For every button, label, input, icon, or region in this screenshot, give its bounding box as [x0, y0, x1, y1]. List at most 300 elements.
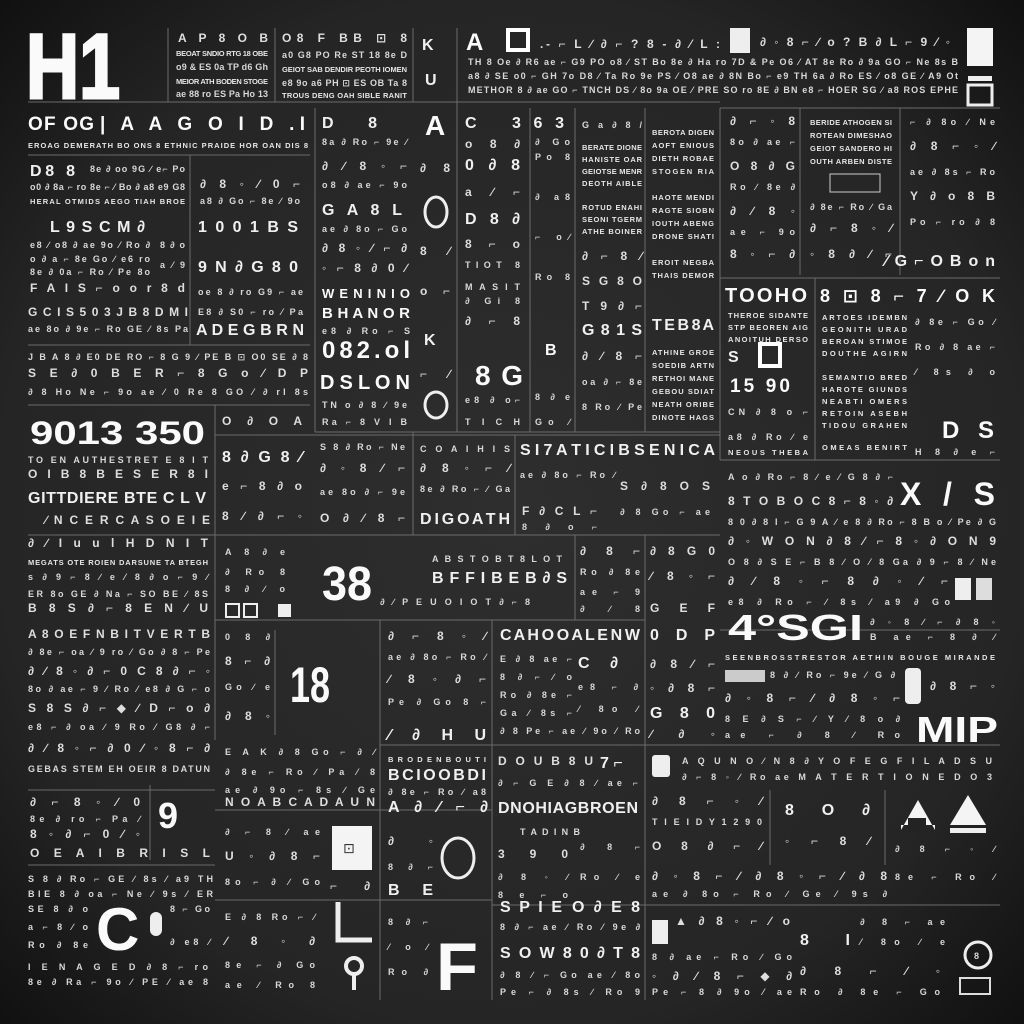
panel: left upper right grid: 1 0 0 1 B S — [198, 219, 298, 236]
panel: narrow column 3: a ∕ ⌐ — [465, 185, 520, 199]
panel: middle band: e ⌐ 8 ∂ o — [222, 479, 302, 493]
panel: right lower heading and glyph rows: A Q U N O ∕ N 8 ∂ Y O F E G F I L A D S U — [682, 756, 992, 766]
panel: right lower heading and glyph rows: 8 O ∂ — [785, 802, 870, 819]
panel: right middle: GEONITH URAD — [822, 325, 908, 334]
panel: narrow column 3: 0 ∂ 8 — [465, 157, 520, 174]
icon: top glyphs K and U — [422, 37, 437, 89]
panel: bars and dense columns: ROTUD ENAHI — [582, 203, 642, 212]
panel: bottom middle blocks — [222, 902, 372, 990]
panel: right lower heading and glyph rows: ∂ ⌐ 8 ◦ ∕ Ro ae M A T E R T I O N E D O 3 — [682, 772, 992, 782]
icon: top glyphs K and U: K — [422, 37, 434, 54]
panel: right lower band: ∂ 8 ⌐ ◦ — [930, 679, 995, 693]
panel: right middle: ANOITUH DERSO — [728, 335, 808, 344]
panel: bottom left: SE 8 ∂ o — [28, 904, 88, 914]
panel: column 380 to 492: ∕ 8 ◦ ∂ ⌐ — [385, 672, 486, 686]
panel: right middle: STP BEOREN AIG — [728, 323, 808, 332]
panel: bottom middle blocks: ae ∕ Ro 8 — [225, 980, 315, 990]
panel: upper right dense grid: ∕ G ⌐ O B o n — [882, 253, 995, 270]
panel: narrow column 3: 8 G — [475, 360, 523, 391]
panel: lower centre-right column: ∕ ∂ ◦ — [647, 727, 715, 741]
panel: glyph column with letter A: 8 ∕ — [420, 244, 453, 258]
panel: bottom left: ∂ ⌐ 8 ◦ ∕ 0 — [30, 795, 140, 809]
panel: right middle: D S — [942, 417, 994, 444]
panel: upper right dense grid: ae ⌐ 9o — [730, 227, 796, 237]
panel: bottom left: 9 — [158, 795, 178, 836]
panel: middle band: 8e ∂ Ro ⌐ ∕ Ga — [420, 484, 511, 494]
panel: centre-left column: TN o ∂ 8 ∕ 9e — [322, 400, 407, 410]
panel: middle band: S 8 ∂ Ro ⌐ Ne — [320, 442, 405, 452]
panel: bottom right blocks: 8 ∂ ae ⌐ Ro ∕ Go — [652, 952, 792, 962]
panel: upper right dense grid: ∂ 8e ⌐ Ro ∕ Ga — [810, 202, 893, 212]
panel: right middle: H 8 ∂ e ⌐ — [915, 447, 995, 457]
panel: diagnostic heading column: 3 9 0 — [498, 847, 568, 861]
panel: bars and dense columns: NEATH ORIBE — [652, 400, 714, 409]
panel: bars and dense columns: ∂ Go — [535, 137, 570, 147]
panel: middle band: C O A I H I S — [420, 444, 510, 454]
panel: bars and dense columns: HANISTE OAR — [582, 155, 643, 164]
panel: left upper right grid: A D E G B R N — [196, 322, 304, 339]
panel: right lower heading and glyph rows: 8e ⌐ Ro ∕ — [895, 872, 997, 882]
panel: right lower heading and glyph rows — [652, 755, 997, 899]
panel: centre-left column: ◦ ⌐ 8 ∂ 0 ∕ — [322, 261, 410, 275]
panel: central numbers: ∂ ∕ P E U O I O T ∂ ⌐ 8 — [380, 597, 530, 607]
panel: left text bands: s ∂ 9 ⌐ 8 ∕ e ⁄ 8 ∂ o ⌐ 9 ∕ — [28, 572, 210, 582]
panel: right lower band: ∂ ◦ 8 ⌐ ∕ ∂ 8 ◦ ⌐ — [725, 691, 900, 705]
panel: bars and dense columns: BERATE DIONE — [582, 143, 642, 152]
panel: bars and dense columns: IOUTH ABENG — [652, 219, 714, 228]
panel: bars and dense columns: EROIT NEGBA — [652, 258, 715, 267]
panel: left upper blocks: L 9 S C M ∂ — [50, 219, 145, 236]
panel: bars and dense columns: ⌐ o∕ — [535, 232, 572, 242]
panel: upper right dense grid: GEIOT SANDERO HI — [810, 144, 892, 153]
panel: right middle: a8 ∂ Ro ∕ e — [728, 432, 808, 442]
panel: narrow column 3: e8 ∂ o⌐ — [465, 395, 520, 405]
panel: bars and dense columns: Po 8 — [535, 152, 570, 162]
panel: left upper right grid: oe 8 ∂ ro G9 ⌐ ae — [198, 287, 303, 297]
panel: centre-left column: ae ∂ 8o ⌐ Go — [322, 224, 408, 234]
panel: top strip text blocks: o9 & ES 0a TP d6 Gh — [176, 62, 268, 72]
panel: bars and dense columns: oa ∂ ⌐ 8e — [582, 377, 642, 387]
panel: bottom centre text: O ∂ E 8 — [572, 899, 640, 916]
panel: lower centre-right column: ∂ ∕ 8 — [580, 604, 640, 614]
panel: middle band: 8 ∕ ∂ ⌐ ◦ — [222, 509, 302, 523]
panel: lower centre column with circle — [386, 799, 488, 1005]
panel: diagnostic heading column: C ∂ — [578, 655, 618, 672]
panel: diagnostic heading column: ⁄ 8o ∕ — [576, 704, 640, 714]
panel: upper right dense grid: 8 ◦ ⌐ ∂ — [730, 247, 795, 261]
panel: glyph column with letter A: K — [424, 332, 436, 349]
panel: left text bands: ∕ N C E R C A S O E I E — [42, 513, 210, 527]
panel: central numbers: 8 ∂ ∕ o — [225, 584, 286, 594]
panel: column 380 to 492: Pe ∂ Go 8 ⌐ — [388, 697, 486, 707]
panel: bottom right blocks: ∂ 8 ⌐ ∕ ◦ — [800, 964, 940, 978]
panel: lower centre-right column — [580, 544, 715, 741]
panel: narrow column 3: M A S I T — [465, 282, 520, 292]
panel: bottom left: C — [96, 896, 139, 963]
panel: left text bands: TO EN AUTHESTRET E 8 I T — [28, 455, 208, 465]
panel: right dense band: X / S — [900, 476, 995, 512]
panel: diagnostic heading column: C A H O O A L E N W — [500, 627, 641, 644]
panel: narrow column 3: ∂ ⌐ 8 — [465, 314, 520, 328]
panel: glyph column with letter A — [420, 110, 453, 418]
panel: lower centre column with circle: A ∂ ∕ ⌐ ∂ — [388, 799, 488, 816]
panel: lower centre-right column: ∂ 8 ⌐ — [580, 544, 640, 558]
panel: upper right dense grid — [730, 114, 998, 270]
panel: upper right dense grid: ∂ ⌐ ◦ 8 — [730, 114, 795, 128]
panel: bars and dense columns: 3 6 3 — [512, 115, 564, 132]
panel: column 380 to 492: B C I O O B D I — [388, 767, 486, 784]
panel: right middle: TIDOU GRAHEN — [822, 421, 907, 430]
panel: bars and dense columns: G 8 1 S — [582, 322, 642, 339]
panel: central numbers: 38 — [322, 558, 372, 611]
panel: upper right dense grid: ∂ ⌐ 8 ◦ ∕ — [810, 221, 895, 235]
panel: top right strip: a8 ∂ SE o0 ⌐ GH 7o D8 ∕ Ta Ro 9e PS ⁄ O8 ae ∂ 8N Bo ⌐ e9 TH 6a ∂ Ro ES ⁄ o8 GE ∕ A9 Ot — [468, 71, 958, 81]
panel: left upper blocks: e8 ∕ o8 ∂ ae 9o ⁄ Ro ∂ — [30, 240, 151, 250]
panel: left text bands: GEBAS STEM EH OEIR 8 DATUN — [28, 764, 210, 774]
panel: bottom right blocks — [652, 914, 991, 997]
panel: left upper blocks: HERAL OTMIDS AEGO TIAH BROE — [30, 197, 185, 206]
panel: left text bands: ER 8o GE ∂ Na ⌐ SO BE ∕ 8S — [28, 589, 208, 599]
panel: bars and dense columns: ∂ ⌐ 8 ∕ — [582, 249, 645, 263]
panel: lower centre column with circle: ∂ ◦ — [388, 834, 433, 848]
panel: NOAB heading and icon card: U ◦ ∂ 8 ⌐ — [225, 849, 320, 863]
panel: narrow column 3: ∂ Gi 8 — [465, 296, 520, 306]
panel: bars and dense columns: SOEDIB ARTN — [652, 361, 714, 370]
panel: lower centre-right column: ae ⌐ 9 — [580, 587, 640, 597]
panel: NOAB heading and icon card: 8o ⌐ ∂ ∕ Go — [225, 877, 320, 887]
panel: bottom left: 8e ∂ ro ⌐ Pa ∕ — [30, 814, 142, 824]
panel: left upper blocks — [28, 163, 189, 334]
panel: upper right dense grid: O 8 ∂ G — [730, 159, 795, 173]
panel: column 380 to 492: ∂ ⌐ 8 ◦ ∕ — [388, 629, 489, 643]
panel: top right strip: TH 8 Oe ∂ R6 ae ⌐ G9 PO o8 ∕ ST Bo 8e ∂ Ha ro 7D & Pe O6 ⁄ AT 8e Ro ∂ 9a GO ⌐ Ne 8s B — [468, 57, 958, 67]
panel: bottom right blocks: Pe ⌐ 8 ∂ 9o ⁄ ae — [652, 987, 792, 997]
panel: top strip text blocks: MEIOR ATH BODEN STOGE — [176, 77, 268, 86]
panel: central numbers: A B S T O B T 8 L O T — [432, 554, 562, 564]
panel: diagnostic heading column: 8 e ⌐ o — [498, 890, 568, 900]
panel: right lower heading and glyph rows: ◦ ⌐ 8 ∕ — [785, 834, 873, 848]
panel: centre-left column: W E N I N I O — [322, 286, 410, 301]
panel: right middle: Ro ∂ 8 ae ⌐ — [915, 342, 995, 352]
panel: bars and dense columns: HAOTE MENDI — [652, 193, 714, 202]
panel: right dense band: A o ∂ Ro ⌐ 8 ∕ e ⁄ G 8 ∂ ⌐ — [728, 472, 893, 482]
panel: right lower heading and glyph rows: ∂ 8 ⌐ ◦ ∕ — [895, 844, 997, 854]
panel: lower centre-right column: ∕ 8 ◦ ⌐ — [647, 569, 715, 583]
panel: bottom left: ∂ e8 ∕ — [170, 937, 212, 947]
heading: TOOHO row — [725, 285, 995, 307]
panel: bars and dense columns: DIETH ROBAE — [652, 154, 714, 163]
panel: middle band: O ∂ O A — [222, 414, 302, 428]
panel: diagnostic heading column: Ro ∂ 8e ⌐ — [500, 690, 572, 700]
panel: bottom centre text: 8 ∂ ⌐ ae ∕ Ro ⁄ 9e ∂ — [500, 922, 641, 932]
panel: bars and dense columns: ATHINE GROE — [652, 348, 714, 357]
panel: centre-left column: 8a ∂ Ro ⌐ 9e ∕ — [322, 137, 409, 147]
panel: diagnostic heading column: ∂ ⌐ G E ∂ 8 ∕ ae ⌐ — [498, 778, 638, 788]
panel: bottom centre text: S O W 8 0 ∂ T 8 — [500, 945, 640, 962]
panel: top strip text blocks: TROUS DENG OAH SIBLE RANIT — [282, 91, 407, 100]
panel: bars and dense columns: AOFT ENIOUS — [652, 141, 714, 150]
panel: bottom right blocks: ◦ ∂ ∕ 8 ⌐ ◆ ∂ — [652, 969, 792, 983]
panel: bottom centre text: Pe ⌐ ∂ 8s ∕ Ro 9 — [500, 987, 640, 997]
panel: left upper right grid: ∂ 8 ◦ ∕ 0 ⌐ — [200, 177, 300, 191]
panel: top right strip: METHOR 8 ∂ ae GO ⌐ TNCH DS ∕ 8o 9a OE ⁄ PRE SO ro 8E ∂ BN e8 ⌐ HOER SG ∕ a8 ROS EPHE — [468, 85, 958, 95]
panel: bars and dense columns: 8 Ro ∕ Pe — [582, 402, 642, 412]
panel: middle band: S ∂ 8 O S — [620, 479, 710, 493]
panel: middle band — [222, 414, 715, 532]
panel: left upper blocks: ae 8o ∂ 9e ⌐ Ro GE ∕ 8s Pa — [28, 324, 189, 334]
panel: diagnostic heading column: D O U B 8 U — [498, 754, 593, 768]
panel: lower centre column with circle: 8 ∂ ⌐ — [388, 917, 428, 927]
panel: right lower band: ae ⌐ ∂ 8 ∕ Ro — [725, 730, 900, 740]
panel: top strip text blocks: GEIOT SAB DENDIR PEOTH IOMEN — [282, 65, 407, 74]
panel: left text bands: O I B 8 B E S E R 8 I — [28, 467, 208, 481]
heading: OF OG row: OF OG — [28, 114, 94, 135]
panel: left text bands: A 8 O E F N B I T V E R T B — [28, 627, 210, 641]
panel: centre-left column: D S L O N — [320, 372, 410, 394]
panel: bars and dense columns: THAIS DEMOR — [652, 271, 715, 280]
panel: right middle: DOUTHE AGIRN — [822, 349, 907, 358]
panel: top strip text blocks: O8 F BB ⊡ 8 — [282, 31, 407, 45]
panel: central numbers: B F F I B E B ∂ S — [432, 570, 567, 587]
heading: TOOHO row: 8 ⊡ 8 ⌐ 7 ∕ O K — [820, 286, 995, 306]
panel: NOAB heading and icon card — [225, 795, 375, 893]
panel: right dense band: 8 T O B O C 8 ⌐ 8 ◦ ∂ — [728, 494, 893, 508]
panel: bottom left: 8 ◦ ∂ ⌐ 0 ∕ ◦ — [30, 827, 140, 841]
panel: central numbers: A 8 ∂ e — [225, 547, 285, 557]
panel: bottom left — [28, 795, 214, 987]
panel: NOAB heading and icon card: N O A B C A D A U N — [225, 795, 375, 809]
panel: left upper blocks: o0 ∂ 8a ⌐ ro 8e ⌐ ⁄ Bo ∂ a8 e9 G8 — [30, 182, 185, 192]
panel: top strip text blocks: e8 9o a6 PH ⊡ ES OB Ta 8 — [282, 78, 407, 88]
panel: 18 card: E A K ∂ 8 Go ⌐ ∂ ∕ — [225, 747, 377, 757]
panel: left text bands: 8o ∂ ae ⌐ 9 ∕ Ro ⁄ e8 ∂ G ⌐ o — [28, 684, 210, 694]
panel: centre-left column: ∂ ∕ 8 ◦ ⌐ — [322, 159, 407, 173]
panel: right dense band: 8 0 ∂ 8 I ⌐ G 9 A ∕ e 8 ∂ Ro ⌐ 8 B o ⁄ Pe ∂ G — [728, 517, 996, 527]
panel: bars and dense columns: DINOTE HAGS — [652, 413, 714, 422]
panel: top right strip: .- ⌐ L ∕ ∂ ⌐ ? 8 - ∂ ⁄ L : — [540, 37, 720, 51]
panel: diagnostic heading column: T A D I N B — [520, 827, 580, 837]
panel: left upper right grid: a8 ∂ Go ⌐ 8e ∕ 9o — [200, 196, 300, 206]
panel: upper right dense grid: ∂ 8 ⌐ ◦ ∕ — [910, 139, 998, 153]
panel: middle band: 8 ∂ G 8 ∕ — [222, 449, 305, 466]
panel: left upper right grid — [196, 177, 304, 339]
panel: diagnostic heading column: Ga ∕ 8s ⌐ — [500, 708, 572, 718]
panel: lower centre column with circle: 8 ∂ ⌐ — [388, 862, 433, 872]
panel: bars and dense columns: 8 ∂ e — [535, 392, 570, 402]
panel: top right strip: ∂ ◦ 8 ⌐ ∕ o ? B ∂ L ⌐ 9 ⁄ ◦ — [760, 35, 950, 49]
panel: 18 card: 8 ⌐ ∂ — [225, 654, 270, 668]
panel: right lower heading and glyph rows: O 8 ∂ ⌐ ∕ — [652, 839, 765, 853]
panel: right middle: OMEAS BENIRT — [822, 443, 907, 452]
panel: central numbers: ∂ Ro 8 — [225, 567, 285, 577]
panel: narrow column 3: o 8 ∂ — [465, 137, 520, 151]
heading: TOOHO row: TOOHO — [725, 285, 807, 307]
panel: middle band: ∂ 8 ◦ ⌐ ∕ — [420, 461, 513, 475]
panel: upper right dense grid: ⌐ ∂ 8o ∕ Ne — [910, 117, 995, 127]
panel: right dense band — [728, 472, 996, 607]
panel: right dense band: e8 ∂ Ro ⌐ ∕ 8s ⁄ a9 ∂ Go — [728, 597, 950, 607]
panel: right lower band — [725, 617, 997, 740]
panel: upper right dense grid: Po ⌐ ro ∂ 8 — [910, 217, 995, 227]
panel: NOAB heading and icon card: ⌐ ∂ — [330, 879, 370, 893]
panel: bottom middle blocks: ∕ 8 ◦ ∂ — [222, 934, 315, 948]
panel: left text bands: GITTDIERE BTE C L V — [28, 490, 206, 507]
panel: column 380 to 492: ∂ 8e ⌐ Ro ∕ a8 — [388, 787, 486, 797]
panel: lower centre column with circle: B E — [388, 882, 433, 899]
panel: upper right dense grid: ae ∂ 8s ⌐ Ro — [910, 167, 996, 177]
panel: centre-left column: o8 ∂ ae ⌐ 9o — [322, 180, 408, 190]
panel: left text bands: ∂ ∕ 8 ◦ ⌐ ∂ 0 ∕ ◦ 8 ⌐ ∂ — [28, 741, 210, 755]
panel: top strip text blocks: a0 G8 PO Re ST 18 8e D — [282, 50, 408, 60]
panel: right lower band: B ae ⌐ 8 ∂ ∕ — [870, 632, 997, 642]
panel: right middle: HAROTE GIUNDS — [822, 385, 907, 394]
panel: right middle: SEMANTIO BRED — [822, 373, 908, 382]
panel: right lower band: SEENBROSSTRESTOR AETHIN BOUGE MIRANDE — [725, 653, 995, 662]
panel: right lower band: 8 ∂ ∕ Ro ⌐ 9e ⁄ G ∂ — [770, 670, 896, 680]
panel: right middle: ∂ 8e ⌐ Go ∕ — [915, 317, 997, 327]
panel: bottom centre text — [500, 899, 641, 997]
panel: upper right dense grid: BERIDE ATHOGEN SI — [810, 118, 892, 127]
panel: bars and dense columns: GEBOU SDIAT — [652, 387, 714, 396]
panel: middle band: O ∂ ∕ 8 ⌐ — [320, 511, 405, 525]
panel: narrow column 3: C — [465, 115, 477, 132]
panel: bottom right blocks: ∂ 8 ⌐ ae — [860, 917, 945, 927]
panel: bars and dense columns: Ro 8 — [535, 272, 570, 282]
panel: bars and dense columns: SEONI TGERM — [582, 215, 642, 224]
heading: OF OG row: EROAG DEMERATH BO ONS 8 ETHNIC PRAIDE HOR OAN DIS 8 — [28, 141, 308, 150]
panel: left text bands: ∂ ∕ I u u l H D N I T — [28, 536, 209, 550]
panel: centre-left column: ∂ 8 ◦ ∕ ⌐ ∂ — [322, 241, 407, 255]
panel: right dense band: O 8 ∂ S E ⌐ B 8 ∕ O ⁄ 8 Ga ∂ 9 ⌐ 8 ∕ Ne — [728, 557, 996, 567]
panel: bars and dense columns: RETHOI MANE — [652, 374, 714, 383]
panel: upper right dense grid: ∂ ∕ 8 ◦ — [730, 204, 795, 218]
panel: lower centre column with circle: ⁄ o ∕ — [386, 942, 430, 952]
panel: right dense band: ∂ ∕ 8 ◦ ⌐ 8 ∂ ◦ ∕ ⌐ — [728, 574, 948, 588]
panel: bars and dense columns: RAGTE SIOBN — [652, 206, 714, 215]
panel: left text bands: ∂ 8e ⌐ oa ∕ 9 ro ⁄ Go ∂ 8 ⌐ Pe — [28, 647, 210, 657]
panel: upper right dense grid: OUTH ARBEN DISTE — [810, 157, 892, 166]
panel: right lower heading and glyph rows: ∂ 8 ⌐ ◦ ∕ — [652, 794, 765, 808]
panel: diagnostic heading column: 8 ∂ ⌐ ∕ o — [500, 672, 572, 682]
panel: centre-left column: Ra ⌐ 8 V I B — [322, 417, 408, 427]
panel: lower centre-right column: G 8 0 — [650, 705, 715, 722]
panel: left upper blocks: G C I S 5 0 3 J B 8 D M I — [28, 305, 188, 319]
panel: middle band: ∂ 8 Go ⌐ ae — [620, 507, 710, 517]
panel: lower centre column with circle: Ro ∂ — [388, 967, 429, 977]
panel: left middle strips — [28, 352, 308, 397]
panel: top right strip: A — [466, 29, 483, 56]
panel: middle band: 8 ∂ o ⌐ — [522, 522, 597, 532]
panel: left middle strips: ∂ 8 Ho Ne ⌐ 9o ae ∕ 0 Re 8 GO ⁄ ∂ rI 8s — [28, 387, 308, 397]
panel: right middle: ARTOES IDEMBN — [822, 313, 907, 322]
panel: narrow column 3: TIOT 8 — [465, 260, 520, 270]
panel: bars and dense columns: ∂ a8 — [535, 192, 570, 202]
title: 9013 350: 9013 350 — [30, 415, 205, 451]
panel: bottom right blocks: 8 — [974, 951, 979, 961]
panel: right middle: THEROE SIDANTE — [728, 311, 808, 320]
panel: bars and dense columns: ATHE BOINER — [582, 227, 643, 236]
panel: glyph column with letter A: o ⌐ — [420, 284, 450, 298]
panel: left upper blocks: 8 ∂ o — [160, 240, 186, 250]
panel: right middle: S — [728, 349, 739, 366]
panel: glyph column with letter A: A — [425, 110, 445, 141]
panel: diagnostic heading column: e8 ⌐ ∂ — [578, 682, 639, 692]
panel: 18 card — [225, 632, 377, 795]
panel: bars and dense columns: ∂ ∕ 8 ⌐ — [582, 349, 642, 363]
panel: diagnostic heading column: DNOHIAGBROEN — [498, 800, 638, 817]
panel: NOAB heading and icon card: ∂ ⌐ 8 ∕ ae — [225, 827, 320, 837]
panel: middle band: S I 7 A T I C I B S E N I C A — [520, 442, 715, 459]
panel: right middle: NEABTI OMERS — [822, 397, 907, 406]
panel: bottom left: 8e ∂ Ra ⌐ 9o ∕ PE ⁄ ae 8 — [28, 977, 208, 987]
panel: 18 card: Go ∕ e — [225, 682, 270, 692]
panel: right middle: CN ∂ 8 o ⌐ — [728, 407, 808, 417]
panel: bottom middle blocks: E ∂ 8 Ro ⌐ ∕ — [225, 912, 317, 922]
panel: diagnostic heading column: 7 ⌐ — [600, 755, 623, 772]
panel: lower centre-right column: Ro ∂ 8e — [580, 567, 640, 577]
panel: narrow column 3: T I C H — [465, 417, 520, 427]
panel: 18 card: 0 8 ∂ — [225, 632, 271, 642]
panel: lower centre-right column: G E F — [650, 601, 715, 615]
panel: left upper blocks: o ∂ a ⌐ 8e Go ∕ e6 ro — [30, 254, 150, 264]
panel: lower centre column with circle: F — [436, 929, 478, 1005]
panel: bars and dense columns: GEIOTSE MENR — [582, 167, 643, 176]
panel: right middle: 15 90 — [730, 376, 790, 397]
panel: left text bands: B 8 S ∂ ⌐ 8 E N ∕ U — [28, 601, 208, 615]
panel: lower centre-right column: 0 D P — [650, 627, 715, 644]
panel: bottom left: I E N A G E D ∂ 8 ⌐ ro — [28, 962, 208, 972]
panel: upper right dense grid: 8o ∂ ae ⌐ — [730, 137, 795, 147]
panel: bottom left: O E A I B R I S L — [30, 846, 210, 860]
panel: diagnostic heading column: E ∂ 8 ae ⌐ — [500, 654, 572, 664]
panel: left upper right grid: 9 N ∂ G 8 0 — [198, 259, 298, 276]
panel: glyph column with letter A: ⌐ ∕ — [420, 367, 453, 381]
panel: centre-left column: e8 ∂ Ro ⌐ S — [322, 326, 410, 336]
panel: left upper blocks: 8e ∂ oo 9G ∕ e⌐ Po — [90, 164, 186, 174]
panel: left text bands — [28, 455, 210, 774]
panel: left upper blocks: 8e ∂ 0a ⌐ Ro ⁄ Pe 8o — [30, 267, 150, 277]
panel: diagnostic heading column: ∂ 8 ⌐ — [580, 842, 640, 852]
panel: bars and dense columns: DEOTH AIBLE — [582, 179, 642, 188]
panel: bars and dense columns: T E B 8 A — [652, 317, 714, 334]
panel: centre-left column: D 8 — [322, 115, 377, 132]
panel: narrow column 3: D 8 ∂ — [465, 211, 520, 228]
panel: bottom centre text: S P I E — [500, 899, 562, 916]
panel: right lower band: ∂ ◦ 8 ∕ ⌐ ∂ 8 ◦ — [870, 617, 995, 627]
panel: bars and dense columns: STOGEN RIA — [652, 167, 715, 176]
panel: right middle: ⁄ 8s ∂ o — [913, 367, 996, 377]
panel: bottom centre text: ∂ 8 ∕ ⌐ Go ae ⁄ 8o — [500, 970, 640, 980]
panel: bottom left: 8 ⌐ Go — [170, 904, 210, 914]
panel: right middle: RETOIN ASEBH — [822, 409, 907, 418]
panel: left upper blocks: D8 8 — [30, 163, 75, 180]
panel: lower centre-right column: ∂ 8 ∕ ⌐ — [650, 657, 715, 671]
panel: left upper right grid: E8 ∂ S0 ⌐ ro ⁄ Pa — [198, 307, 304, 317]
panel: column 380 to 492: B R O D E N B O U T I — [388, 755, 486, 764]
panel: bottom left: Ro ∂ 8e — [28, 940, 88, 950]
panel: left text bands: e8 ⌐ ∂ oa ∕ 9 Ro ⁄ G8 ∂ ⌐ — [28, 722, 210, 732]
panel: right dense band: ∂ ◦ W O N ∂ 8 ∕ ⌐ 8 ◦ ∂ O N 9 — [728, 534, 996, 548]
panel: right lower heading and glyph rows: ∂ ◦ 8 ⌐ ∕ ∂ 8 ◦ ⌐ ∕ ∂ 8 — [652, 869, 887, 883]
panel: middle band: ae ∂ 8o ⌐ Ro ∕ — [520, 470, 617, 480]
panel: bottom right blocks: 8 I — [800, 932, 850, 949]
panel: diagnostic heading column: ∂ 8 ◦ ∕ — [498, 872, 570, 882]
title: M IP: MIP — [916, 709, 998, 750]
panel: narrow column 3: 8 ⌐ o — [465, 237, 520, 251]
panel: lower centre-right column: ∂ 8 G 0 — [650, 544, 715, 558]
title: 4 SGI: 4°SGI — [728, 607, 863, 648]
panel: bottom right blocks: ⁄ 8o ∕ e — [858, 937, 945, 947]
